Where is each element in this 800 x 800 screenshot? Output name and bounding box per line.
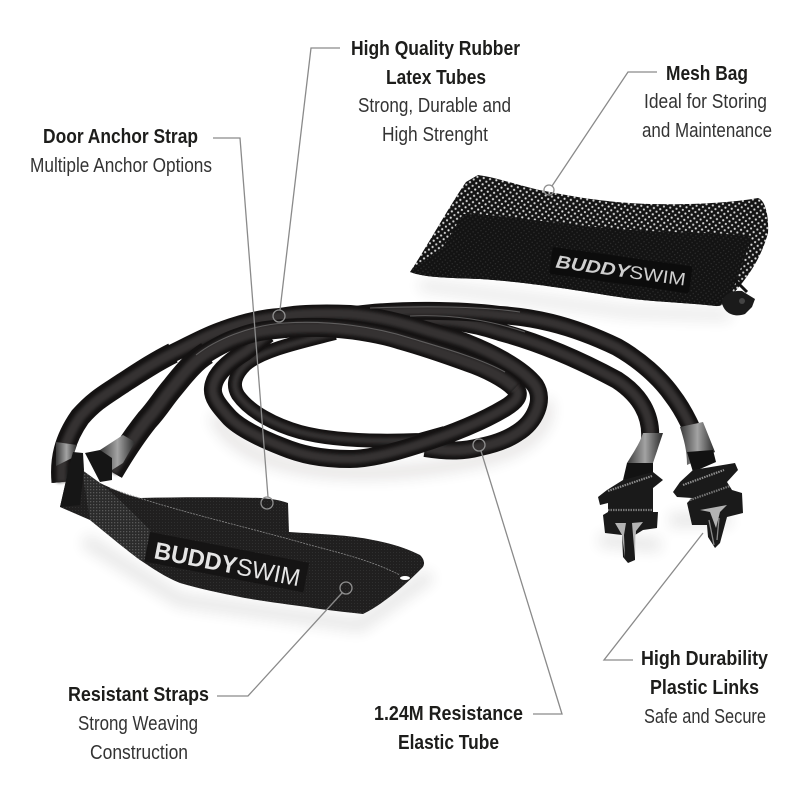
plastic link right (673, 450, 743, 548)
strap stitching (110, 488, 400, 575)
callout: rubber latex tubes: Strong, Durable and (358, 95, 511, 117)
callout: mesh bag: and Maintenance (642, 120, 772, 142)
callout: plastic links: Plastic Links (650, 677, 759, 699)
callout: plastic links (604, 533, 769, 728)
tube highlights (196, 307, 525, 372)
callout: elastic tube (374, 439, 562, 754)
shadows under product (85, 285, 730, 625)
callout: rubber latex tubes: Latex Tubes (386, 67, 486, 89)
callout: rubber latex tubes: High Strenght (382, 124, 488, 146)
callout: rubber latex tubes: High Quality Rubber (351, 38, 520, 60)
inner coil loop (235, 333, 445, 441)
right tube rear (400, 320, 650, 465)
strap eyelet (400, 576, 410, 580)
front coil upper tube (112, 327, 515, 472)
callout: door anchor strap: Multiple Anchor Options (30, 155, 212, 177)
callout: mesh bag: Ideal for Storing (644, 91, 767, 113)
strap back loop (100, 483, 289, 535)
callout: resistant straps: Construction (90, 742, 188, 764)
right tube front (355, 311, 703, 457)
callout: mesh bag (544, 63, 772, 195)
outer coil tube (62, 313, 539, 482)
bag logo label (549, 247, 693, 293)
strap lighter woven end (82, 470, 150, 562)
bag body (410, 175, 768, 306)
callout: door anchor strap: Door Anchor Strap (43, 126, 198, 148)
callout: plastic links: Safe and Secure (644, 706, 766, 728)
strap buckle (60, 452, 84, 507)
callout: elastic tube: 1.24M Resistance (374, 703, 523, 725)
callout: door anchor strap (30, 126, 273, 509)
callout: mesh bag: Mesh Bag (666, 63, 748, 85)
plastic link left (598, 463, 663, 563)
front coil lower tube (213, 334, 518, 459)
strap logo label: BUDDYSWIM (152, 537, 302, 592)
callout: resistant straps: Resistant Straps (68, 684, 209, 706)
right tube collars (627, 433, 663, 463)
callout: resistant straps (68, 582, 352, 764)
bag drawstring toggle (722, 280, 755, 315)
left tube collars (56, 442, 77, 466)
strap front (60, 463, 424, 614)
callout: plastic links: High Durability (641, 648, 769, 670)
callout: elastic tube: Elastic Tube (398, 732, 499, 754)
bag inner dark layer (410, 214, 752, 306)
callout: resistant straps: Strong Weaving (78, 713, 198, 735)
callout: rubber latex tubes (273, 38, 520, 322)
mesh bag (410, 175, 768, 315)
resistant strap (60, 450, 424, 614)
resistance tubes (56, 307, 715, 482)
bag logo label: BUDDY SWIM (555, 252, 687, 290)
